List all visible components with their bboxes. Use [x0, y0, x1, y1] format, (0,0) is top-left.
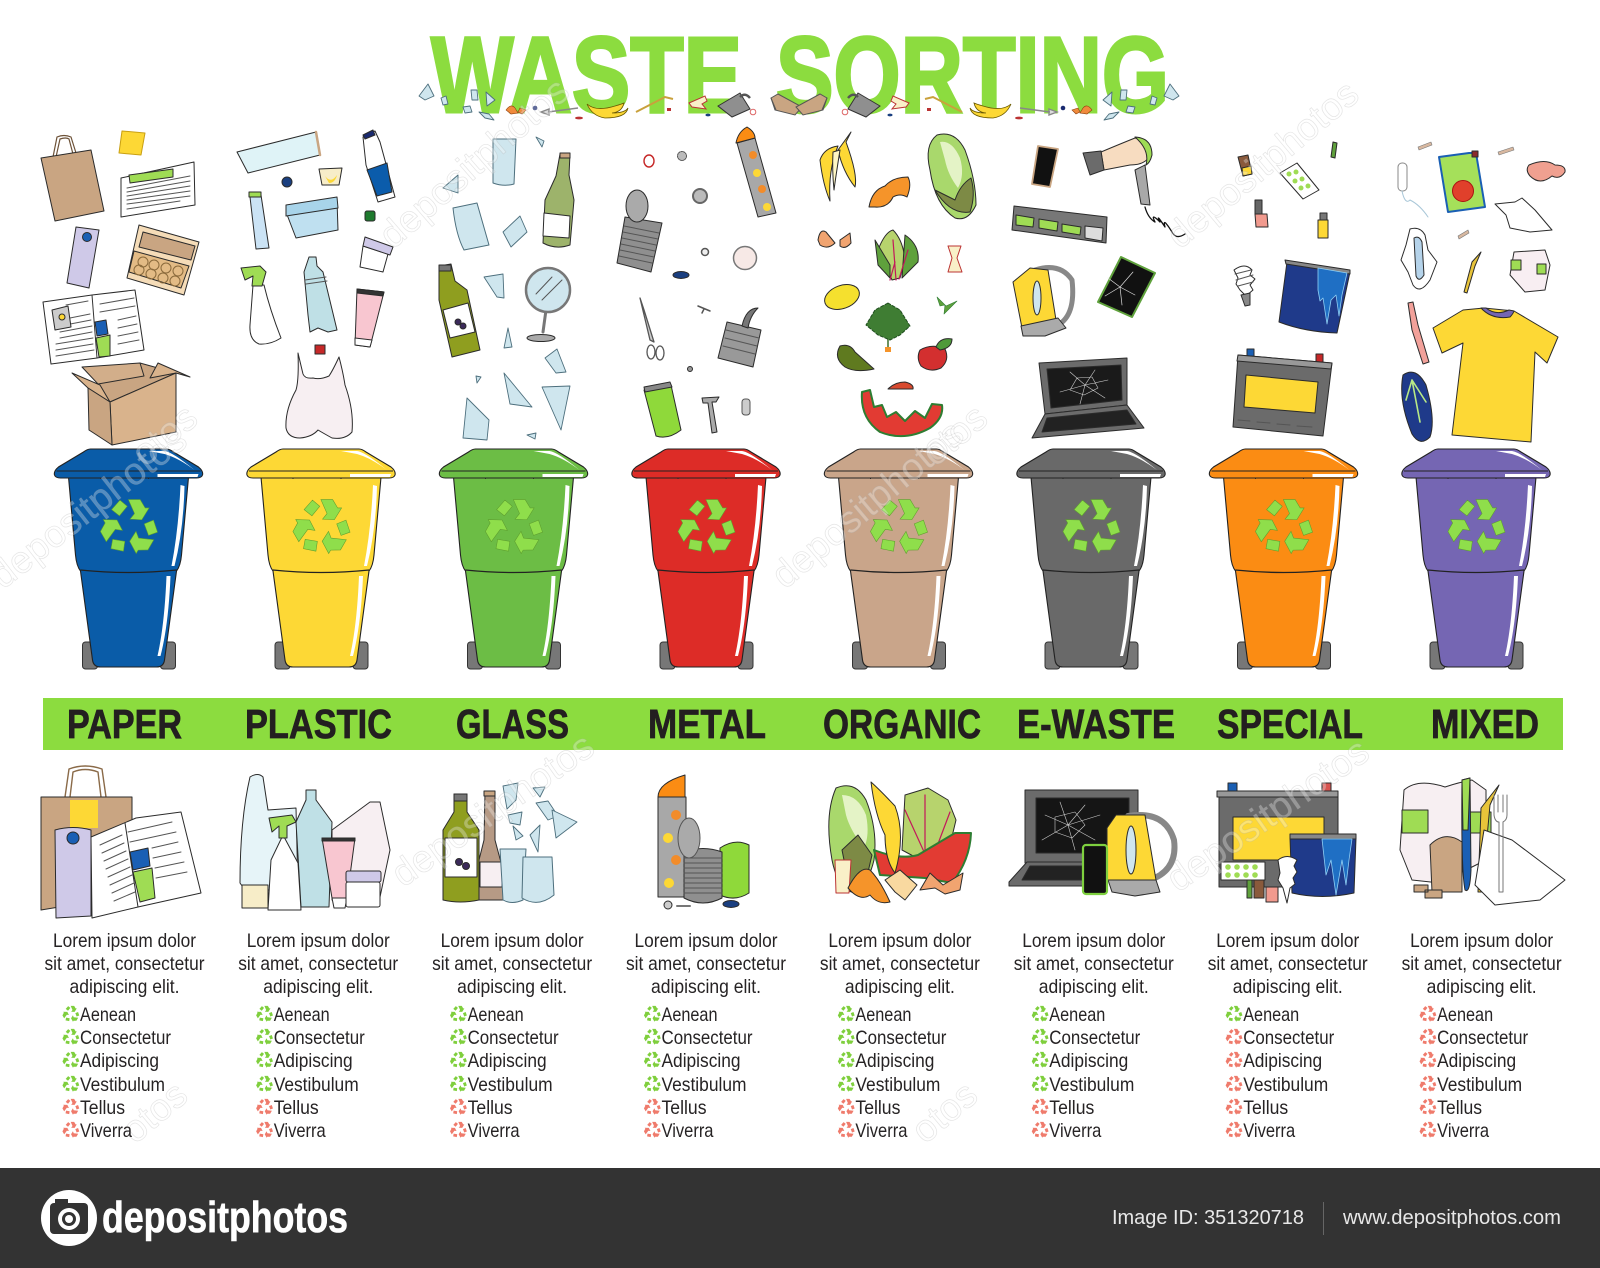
bin: special: [1209, 449, 1358, 669]
text: e-waste: Aenean: [1049, 1004, 1105, 1026]
footer bar: [0, 1168, 1600, 1268]
icon: lemon: [821, 280, 863, 314]
text: e-waste: sit amet, consectetur: [1014, 953, 1174, 975]
text: paper: [44, 930, 205, 1142]
icon: red cap: [315, 345, 325, 354]
text: e-waste: Viverra: [1049, 1120, 1101, 1142]
icon: pill blister: [1280, 163, 1319, 199]
title: [431, 14, 1169, 135]
watermark: depositphotos: [764, 413, 972, 597]
icon: banana peel: [820, 132, 856, 201]
text: special: Lorem ipsum dolor: [1216, 930, 1360, 952]
bin: metal: [632, 449, 780, 669]
icon: ketchup pack: [1439, 151, 1485, 212]
icon: kitchen scale: [1012, 206, 1107, 243]
heading: special: SPECIAL: [1217, 701, 1363, 747]
text: mixed: adipiscing elit.: [1427, 976, 1537, 998]
logo wordmark: depositphotos: [102, 1193, 348, 1242]
icon: crumpled bag: [1495, 198, 1552, 232]
text: e-waste: [1014, 930, 1174, 1142]
icon: cap: [282, 177, 292, 187]
cluster: special: [1217, 783, 1356, 903]
watermark: otos: [914, 397, 996, 475]
icon: aerosol can: [736, 127, 776, 217]
panel: special items: [1233, 142, 1350, 436]
text: glass: sit amet, consectetur: [432, 953, 593, 975]
cluster: organic: [829, 782, 971, 903]
icon: parsley: [866, 303, 910, 352]
icon: green can: [644, 382, 681, 437]
icon: cardboard box: [72, 363, 190, 445]
icon: t-shirt: [1433, 308, 1558, 442]
bin: plastic: [247, 449, 395, 669]
icon: flip-flop: [1402, 372, 1432, 441]
icon: orange peel: [869, 177, 910, 207]
text: metal: Lorem ipsum dolor: [634, 930, 778, 952]
text: paper: Adipiscing: [80, 1050, 159, 1072]
text: special: sit amet, consectetur: [1208, 953, 1368, 975]
heading: mixed: MIXED: [1431, 701, 1539, 747]
icon: screw: [698, 306, 710, 313]
icon: plastic bag: [286, 353, 352, 438]
watermark: otos: [114, 1074, 196, 1152]
text: mixed: Consectetur: [1437, 1027, 1529, 1049]
text: plastic: [238, 930, 399, 1142]
icon: table mirror: [526, 268, 570, 342]
text: e-waste: Tellus: [1049, 1097, 1095, 1119]
text: plastic: Vestibulum: [274, 1074, 359, 1096]
text: glass: Adipiscing: [468, 1050, 547, 1072]
text: organic: adipiscing elit.: [845, 976, 955, 998]
text: special: Tellus: [1243, 1097, 1288, 1119]
icon: glass shards: [443, 137, 570, 440]
text: special: adipiscing elit.: [1233, 976, 1343, 998]
icon: olive oil bottle: [439, 264, 480, 357]
text: plastic: Aenean: [274, 1004, 330, 1026]
icon: avocado: [837, 345, 874, 371]
text: organic: Lorem ipsum dolor: [828, 930, 972, 952]
text: plastic: Consectetur: [274, 1027, 365, 1049]
bin: mixed: [1402, 449, 1550, 669]
icon: yogurt pot: [319, 168, 342, 185]
icon: apple: [918, 339, 952, 370]
text: glass: Viverra: [468, 1120, 520, 1142]
icon: blue cap: [673, 272, 689, 278]
icon: straw: [1464, 252, 1481, 293]
title debris left: [419, 84, 802, 120]
text: plastic: adipiscing elit.: [263, 976, 373, 998]
text: metal: [626, 930, 786, 1142]
text: plastic: sit amet, consectetur: [238, 953, 399, 975]
watermark: otos: [124, 397, 206, 475]
icon: eggshells: [818, 231, 851, 247]
text: e-waste: Consectetur: [1049, 1027, 1141, 1049]
cluster: metal: [658, 775, 749, 909]
icon: chard: [875, 230, 918, 280]
cluster: paper: [41, 766, 201, 918]
icon: juice carton: [67, 227, 99, 288]
bin: glass: [439, 449, 588, 669]
icon: washer: [693, 189, 707, 203]
logo mark: [41, 1190, 97, 1246]
icon: green cap: [365, 211, 375, 221]
image id: Image ID: 351320718: [1112, 1207, 1304, 1229]
cluster: mixed: [1400, 778, 1565, 905]
text: organic: [820, 930, 980, 1142]
icon: sanitary pad: [1401, 228, 1437, 289]
panel: bins: [54, 449, 1550, 669]
text: metal: Consectetur: [662, 1027, 753, 1049]
icon: razor blade: [742, 399, 750, 415]
text: glass: Tellus: [468, 1097, 513, 1119]
watermark: depositphotos: [1159, 73, 1367, 257]
text: metal: Vestibulum: [662, 1074, 746, 1096]
icon: gear: [678, 152, 686, 160]
text: e-waste: adipiscing elit.: [1039, 976, 1149, 998]
heading: glass: GLASS: [456, 701, 569, 747]
text: glass: Consectetur: [468, 1027, 559, 1049]
watermark: depositphotos: [384, 725, 602, 895]
text: mixed: Aenean: [1437, 1004, 1493, 1026]
icon: nut: [702, 248, 708, 256]
text: mixed: Lorem ipsum dolor: [1410, 930, 1554, 952]
text: plastic: Lorem ipsum dolor: [247, 930, 390, 952]
icon: open tin can: [617, 190, 662, 272]
icon: film roll: [237, 132, 320, 173]
text: metal: Aenean: [662, 1004, 718, 1026]
text: paper: Aenean: [80, 1004, 136, 1026]
text: organic: Aenean: [855, 1004, 911, 1026]
heading: paper: PAPER: [67, 701, 182, 747]
text: paper: Lorem ipsum dolor: [53, 930, 196, 952]
text: paper: Vestibulum: [80, 1074, 165, 1096]
icon: paper bag: [41, 136, 104, 221]
icon: cigarette butts: [1418, 142, 1514, 239]
text: plastic: Viverra: [274, 1120, 326, 1142]
text: paper: sit amet, consectetur: [44, 953, 205, 975]
text: special: Consectetur: [1243, 1027, 1335, 1049]
text: metal: Adipiscing: [662, 1050, 740, 1072]
icon: small bottle: [249, 192, 269, 249]
icon: open magazine: [43, 290, 144, 364]
title: SORTING: [776, 14, 1169, 135]
icon: car battery: [1233, 349, 1332, 436]
heading: e-waste: E-WASTE: [1017, 701, 1175, 747]
icon: spray bottle: [241, 266, 281, 344]
text: special: [1208, 930, 1368, 1142]
text: plastic: Tellus: [274, 1097, 319, 1119]
icon: toothbrush: [1408, 302, 1429, 364]
icon: herb sprig: [937, 297, 957, 314]
text: special: Aenean: [1243, 1004, 1299, 1026]
text: e-waste: Vestibulum: [1049, 1074, 1134, 1096]
icon: scissors: [640, 298, 664, 360]
heading: organic: ORGANIC: [823, 701, 981, 747]
icon: jar: [360, 237, 393, 272]
cluster: e-waste: [1009, 790, 1174, 896]
icon: metal disk: [734, 246, 756, 270]
icon: wine bottle: [543, 153, 574, 247]
icon: glass tumbler: [493, 139, 516, 185]
watermark: depositphotos: [371, 70, 577, 257]
icon: diaper: [1510, 250, 1550, 292]
icon: sticky note: [119, 131, 145, 155]
text: organic: Tellus: [855, 1097, 901, 1119]
panel: paper items: [41, 131, 199, 445]
text: mixed: Adipiscing: [1437, 1050, 1516, 1072]
icon: newspaper: [121, 162, 195, 217]
text: glass: Vestibulum: [468, 1074, 553, 1096]
watermark: [0, 70, 1377, 1152]
icon: water bottle: [304, 257, 337, 332]
text: paper: Tellus: [80, 1097, 125, 1119]
panel: mixed items: [1398, 142, 1565, 442]
heading: metal: METAL: [648, 701, 766, 747]
icon: smartphone: [1032, 146, 1058, 187]
text: metal: Viverra: [662, 1120, 714, 1142]
category band: [43, 698, 1563, 750]
text: glass: adipiscing elit.: [457, 976, 567, 998]
text: special: Vestibulum: [1243, 1074, 1328, 1096]
icon: red peel: [888, 382, 913, 389]
icon: lighter: [1318, 213, 1328, 238]
text: metal: adipiscing elit.: [651, 976, 761, 998]
icon: ring: [644, 155, 654, 167]
text: mixed: Viverra: [1437, 1120, 1489, 1142]
icon: razor: [702, 397, 719, 433]
text: metal: Tellus: [662, 1097, 707, 1119]
text: metal: sit amet, consectetur: [626, 953, 786, 975]
icon: cracked tablet: [1098, 257, 1155, 317]
text: organic: Adipiscing: [855, 1050, 934, 1072]
icon: pink tube: [355, 289, 384, 347]
heading: plastic: PLASTIC: [245, 701, 392, 747]
text: e-waste: Lorem ipsum dolor: [1022, 930, 1166, 952]
text: organic: Consectetur: [855, 1027, 947, 1049]
icon: small battery: [1331, 142, 1337, 158]
icon: energy-saving bulb: [1234, 266, 1255, 306]
icon: apple core: [948, 246, 962, 272]
icon: milk bottle: [363, 130, 395, 202]
icon: watermelon rind: [862, 390, 942, 436]
watermark: otos: [904, 1074, 986, 1152]
bin: paper: [54, 449, 203, 669]
text: mixed: sit amet, consectetur: [1402, 953, 1562, 975]
text: organic: Viverra: [855, 1120, 908, 1142]
icon: nail polish: [1255, 200, 1268, 227]
watermark: depositphotos: [1159, 730, 1377, 900]
panel: e-waste items: [1012, 137, 1185, 438]
panel: plastic items: [237, 130, 395, 438]
text: paper: Consectetur: [80, 1027, 171, 1049]
text: glass: Aenean: [468, 1004, 524, 1026]
text: organic: Vestibulum: [855, 1074, 940, 1096]
text: glass: Lorem ipsum dolor: [441, 930, 584, 952]
icon: hair dryer: [1083, 137, 1185, 237]
text: special: Viverra: [1243, 1120, 1295, 1142]
text: paper: adipiscing elit.: [70, 976, 180, 998]
icon: face mask: [1527, 162, 1565, 181]
icon: egg carton: [127, 225, 199, 295]
text: glass: [432, 930, 593, 1142]
text: paper: Viverra: [80, 1120, 132, 1142]
panel: organic items: [818, 132, 976, 436]
icon: paint can: [1279, 260, 1350, 333]
panel: glass items: [439, 137, 574, 440]
cluster: plastic: [240, 774, 390, 910]
title debris right: [796, 84, 1179, 120]
bin: e-waste: [1017, 449, 1165, 669]
icon: electric kettle: [1013, 268, 1073, 336]
icon: laptop: [1032, 358, 1144, 438]
text: plastic: Adipiscing: [274, 1050, 353, 1072]
icon: glass jar: [453, 203, 489, 250]
icon: tampon: [1398, 163, 1428, 217]
icon: chocolate pack: [1238, 155, 1252, 176]
text: e-waste: Adipiscing: [1049, 1050, 1128, 1072]
icon: crushed can: [718, 308, 761, 367]
icon: napa cabbage: [928, 134, 976, 219]
cluster: glass: [443, 783, 577, 902]
text: mixed: Vestibulum: [1437, 1074, 1522, 1096]
bin: organic: [824, 449, 973, 669]
panel: metal items: [617, 127, 776, 437]
text: mixed: [1402, 930, 1562, 1142]
icon: plastic tub: [286, 197, 338, 238]
icon: small bolt: [688, 366, 692, 372]
text: special: Adipiscing: [1243, 1050, 1322, 1072]
website: www.depositphotos.com: [1342, 1207, 1561, 1229]
title: WASTE: [431, 14, 742, 135]
text: organic: sit amet, consectetur: [820, 953, 980, 975]
text: mixed: Tellus: [1437, 1097, 1482, 1119]
